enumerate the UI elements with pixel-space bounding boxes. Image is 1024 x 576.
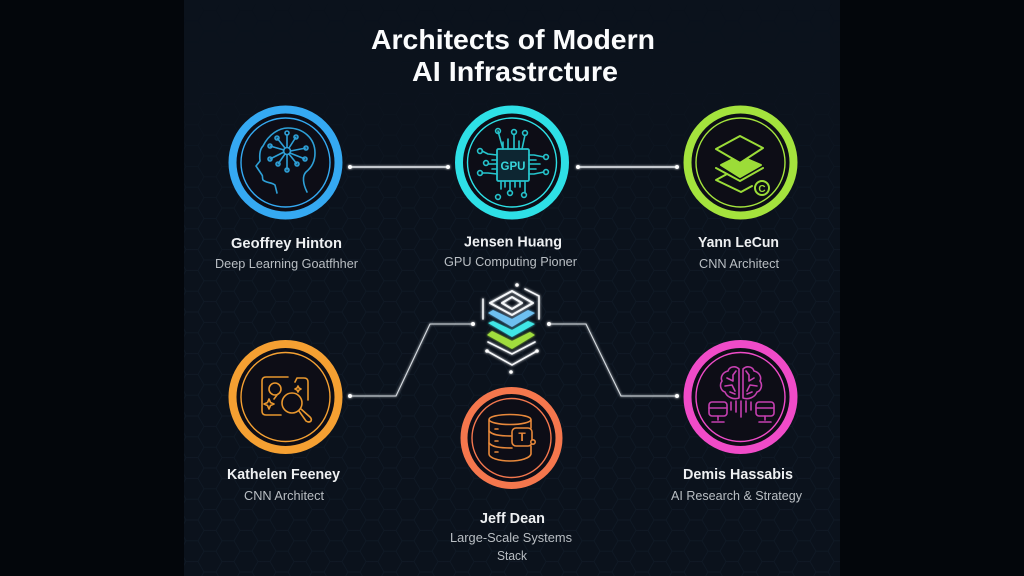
role: Stack bbox=[497, 549, 528, 563]
icon ring: brain head bbox=[232, 110, 338, 216]
icon ring: database: T bbox=[518, 430, 526, 444]
icon ring: layers: C bbox=[758, 184, 766, 195]
name: Jensen Huang bbox=[464, 234, 562, 250]
node: Jeff Dean bbox=[450, 390, 572, 563]
name: Yann LeCun bbox=[698, 234, 779, 251]
icon ring: database bbox=[464, 390, 559, 486]
role: CNN Architect bbox=[244, 489, 325, 503]
cyan layer bbox=[488, 321, 535, 337]
role: CNN Architect bbox=[699, 257, 780, 271]
connector: Huang to LeCun bbox=[576, 165, 679, 169]
icon ring: GPU chip bbox=[459, 110, 565, 216]
name: Kathelen Feeney bbox=[227, 466, 341, 483]
icon ring: brain and servers bbox=[688, 344, 794, 450]
icon ring: layers bbox=[688, 110, 794, 216]
role: AI Research & Strategy bbox=[671, 489, 803, 503]
lower outline layers bbox=[483, 289, 539, 365]
title bbox=[371, 24, 655, 87]
name: Geoffrey Hinton bbox=[231, 235, 342, 252]
title: Architects of Modern bbox=[371, 24, 655, 55]
node: Geoffrey Hinton bbox=[215, 110, 358, 271]
top diamond layer bbox=[490, 291, 533, 315]
icon: central layered stack bbox=[483, 283, 539, 374]
role: GPU Computing Pioner bbox=[444, 255, 577, 269]
node dots bbox=[485, 283, 539, 374]
icon ring: magnifier bbox=[232, 344, 338, 450]
name: Demis Hassabis bbox=[683, 466, 793, 483]
icon ring: GPU chip: GPU bbox=[500, 161, 526, 173]
connector: Feeney to stack bbox=[348, 322, 475, 398]
role bbox=[450, 531, 572, 563]
role: Deep Learning Goatfhher bbox=[215, 257, 358, 271]
title: AI Infrastrcture bbox=[412, 56, 618, 87]
connector: Hinton to Huang bbox=[348, 165, 450, 169]
connector: stack to Hassabis bbox=[547, 322, 679, 398]
node: Yann LeCun bbox=[688, 110, 794, 271]
node: Demis Hassabis bbox=[671, 344, 803, 503]
node: Jensen Huang bbox=[444, 110, 577, 269]
name: Jeff Dean bbox=[480, 510, 545, 527]
background panel bbox=[184, 0, 840, 576]
role: Large-Scale Systems bbox=[450, 531, 572, 545]
node: Kathelen Feeney bbox=[227, 344, 341, 503]
blue layer bbox=[488, 310, 535, 327]
green layer bbox=[487, 331, 535, 349]
